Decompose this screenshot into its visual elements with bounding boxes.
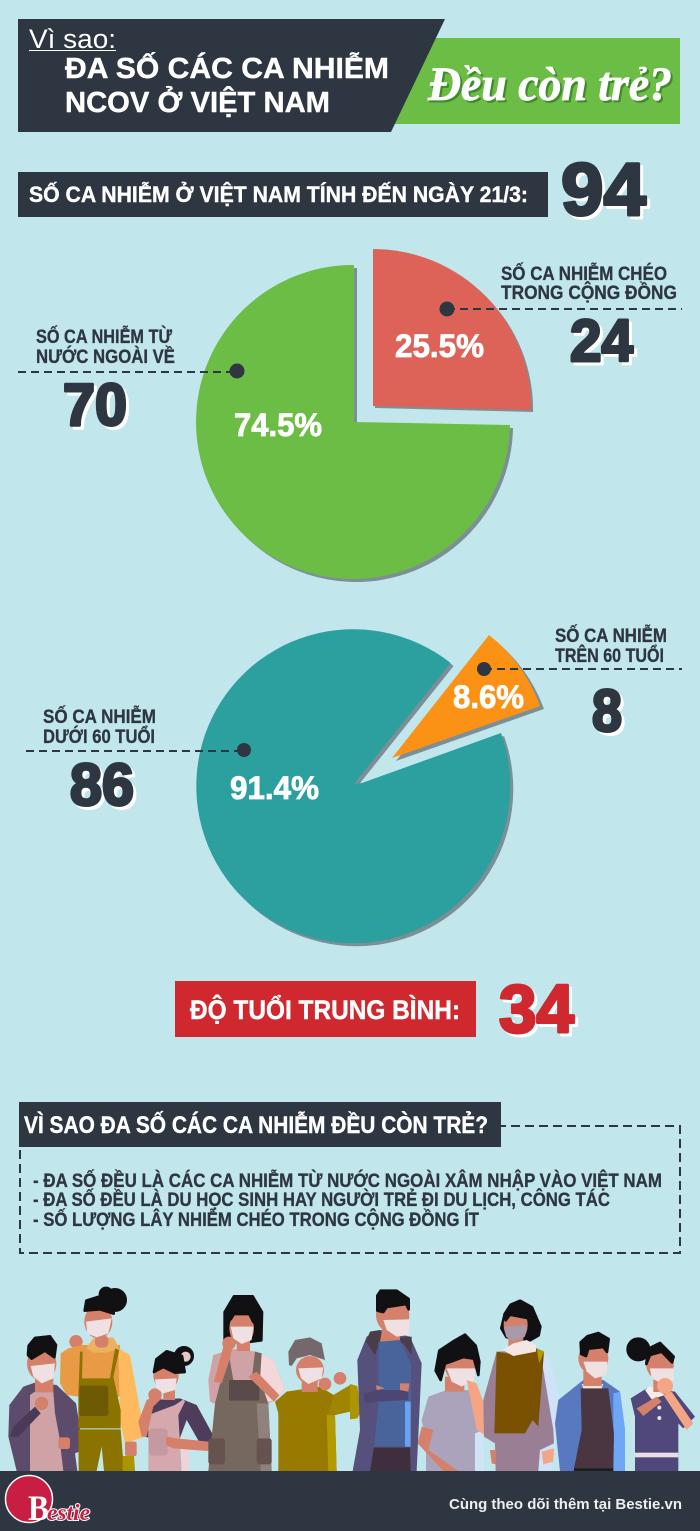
callout: community cases: TRONG CỘNG ĐỒNG [501, 282, 677, 304]
title text: ĐA SỐ CÁC CA NHIỄM [65, 51, 389, 85]
person 10 [628, 1339, 695, 1471]
callout: imported cases: 70 [63, 372, 127, 438]
kicker: Vì sao: Vì sao: [29, 24, 116, 54]
total cases bar [18, 172, 548, 217]
dark title panel [18, 19, 445, 132]
pie chart: origin of cases [196, 249, 533, 582]
callout: over 60: 8 [592, 678, 622, 744]
footer bar [0, 1471, 700, 1531]
footer text: Cùng theo dõi thêm tại Bestie.vn [449, 1496, 682, 1513]
red slice shadow [375, 251, 533, 412]
total cases bar: SỐ CA NHIỄM Ở VIỆT NAM TÍNH ĐẾN NGÀY 21/3: [29, 181, 528, 207]
average age label: ĐỘ TUỔI TRUNG BÌNH: [190, 994, 460, 1025]
dashed frame [20, 1126, 680, 1253]
callout: community cases: 24 [570, 308, 633, 374]
illustration: people wearing masks [8, 1288, 695, 1471]
callout: under 60: DƯỚI 60 TUỔI [43, 726, 155, 748]
callout: under 60: SỐ CA NHIỄM [43, 706, 156, 728]
reasons list: - SỐ LƯỢNG LÂY NHIỄM CHÉO TRONG CỘNG ĐỒNG ÍT [33, 1209, 479, 1231]
teal slice 91.4% [196, 629, 510, 943]
red slice 25.5% [373, 249, 531, 410]
panel heading [19, 1102, 501, 1147]
average age number: 34 [499, 971, 574, 1047]
total number 94: 94 [561, 148, 646, 231]
callout: community cases: SỐ CA NHIỄM CHÉO [501, 263, 667, 285]
person 7 [418, 1335, 492, 1471]
green slice shadow [199, 268, 513, 582]
logo: Bestie [6, 1476, 90, 1528]
person 6 [353, 1291, 422, 1471]
callout: over 60: TRÊN 60 TUỔI [555, 645, 664, 667]
orange slice 8.6% [392, 635, 540, 758]
percent 91.4: 91.4% [230, 770, 319, 806]
average age label [175, 981, 476, 1037]
callout: imported cases: NƯỚC NGOÀI VỀ [36, 346, 175, 368]
logo: Bestie: B [28, 1488, 49, 1528]
callout: over 60 [477, 625, 682, 744]
script title: Đều còn trẻ? [427, 58, 672, 111]
callout: community cases [440, 263, 682, 374]
orange slice shadow [396, 638, 544, 761]
reasons list: - ĐA SỐ ĐỀU LÀ DU HỌC SINH HAY NGƯỜI TRẺ ĐI DU LỊCH, CÔNG TÁC [33, 1189, 610, 1211]
logo: Bestie: estie [47, 1500, 90, 1525]
person 2 [60, 1288, 145, 1471]
callout: under 60: 86 [70, 752, 134, 818]
percent 25.5: 25.5% [395, 328, 484, 364]
callout: over 60: SỐ CA NHIỄM [555, 625, 667, 647]
callout: imported cases: SỐ CA NHIỄM TỪ [36, 326, 172, 348]
green slice 74.5% [196, 265, 510, 579]
reasons list [33, 1170, 662, 1231]
teal slice shadow [199, 632, 513, 946]
pie chart: age groups [196, 629, 544, 946]
person 3 [138, 1347, 217, 1471]
percent 8.6: 8.6% [453, 679, 524, 715]
panel heading: VÌ SAO ĐA SỐ CÁC CA NHIỄM ĐỀU CÒN TRẺ? [24, 1110, 488, 1139]
title banner [18, 19, 680, 132]
person 5 [275, 1337, 350, 1471]
title text line 2: NCOV Ở VIỆT NAM [65, 85, 330, 119]
person 5 sleeve [350, 1384, 361, 1419]
person 9 [555, 1333, 625, 1471]
percent 74.5: 74.5% [234, 407, 322, 443]
person 1 [8, 1336, 83, 1471]
panel: why young [19, 1102, 680, 1253]
person 4 [208, 1296, 285, 1471]
green title panel [394, 38, 680, 124]
callout: under 60 [26, 706, 251, 818]
callout: imported cases [18, 326, 244, 438]
person 8 [483, 1301, 559, 1471]
